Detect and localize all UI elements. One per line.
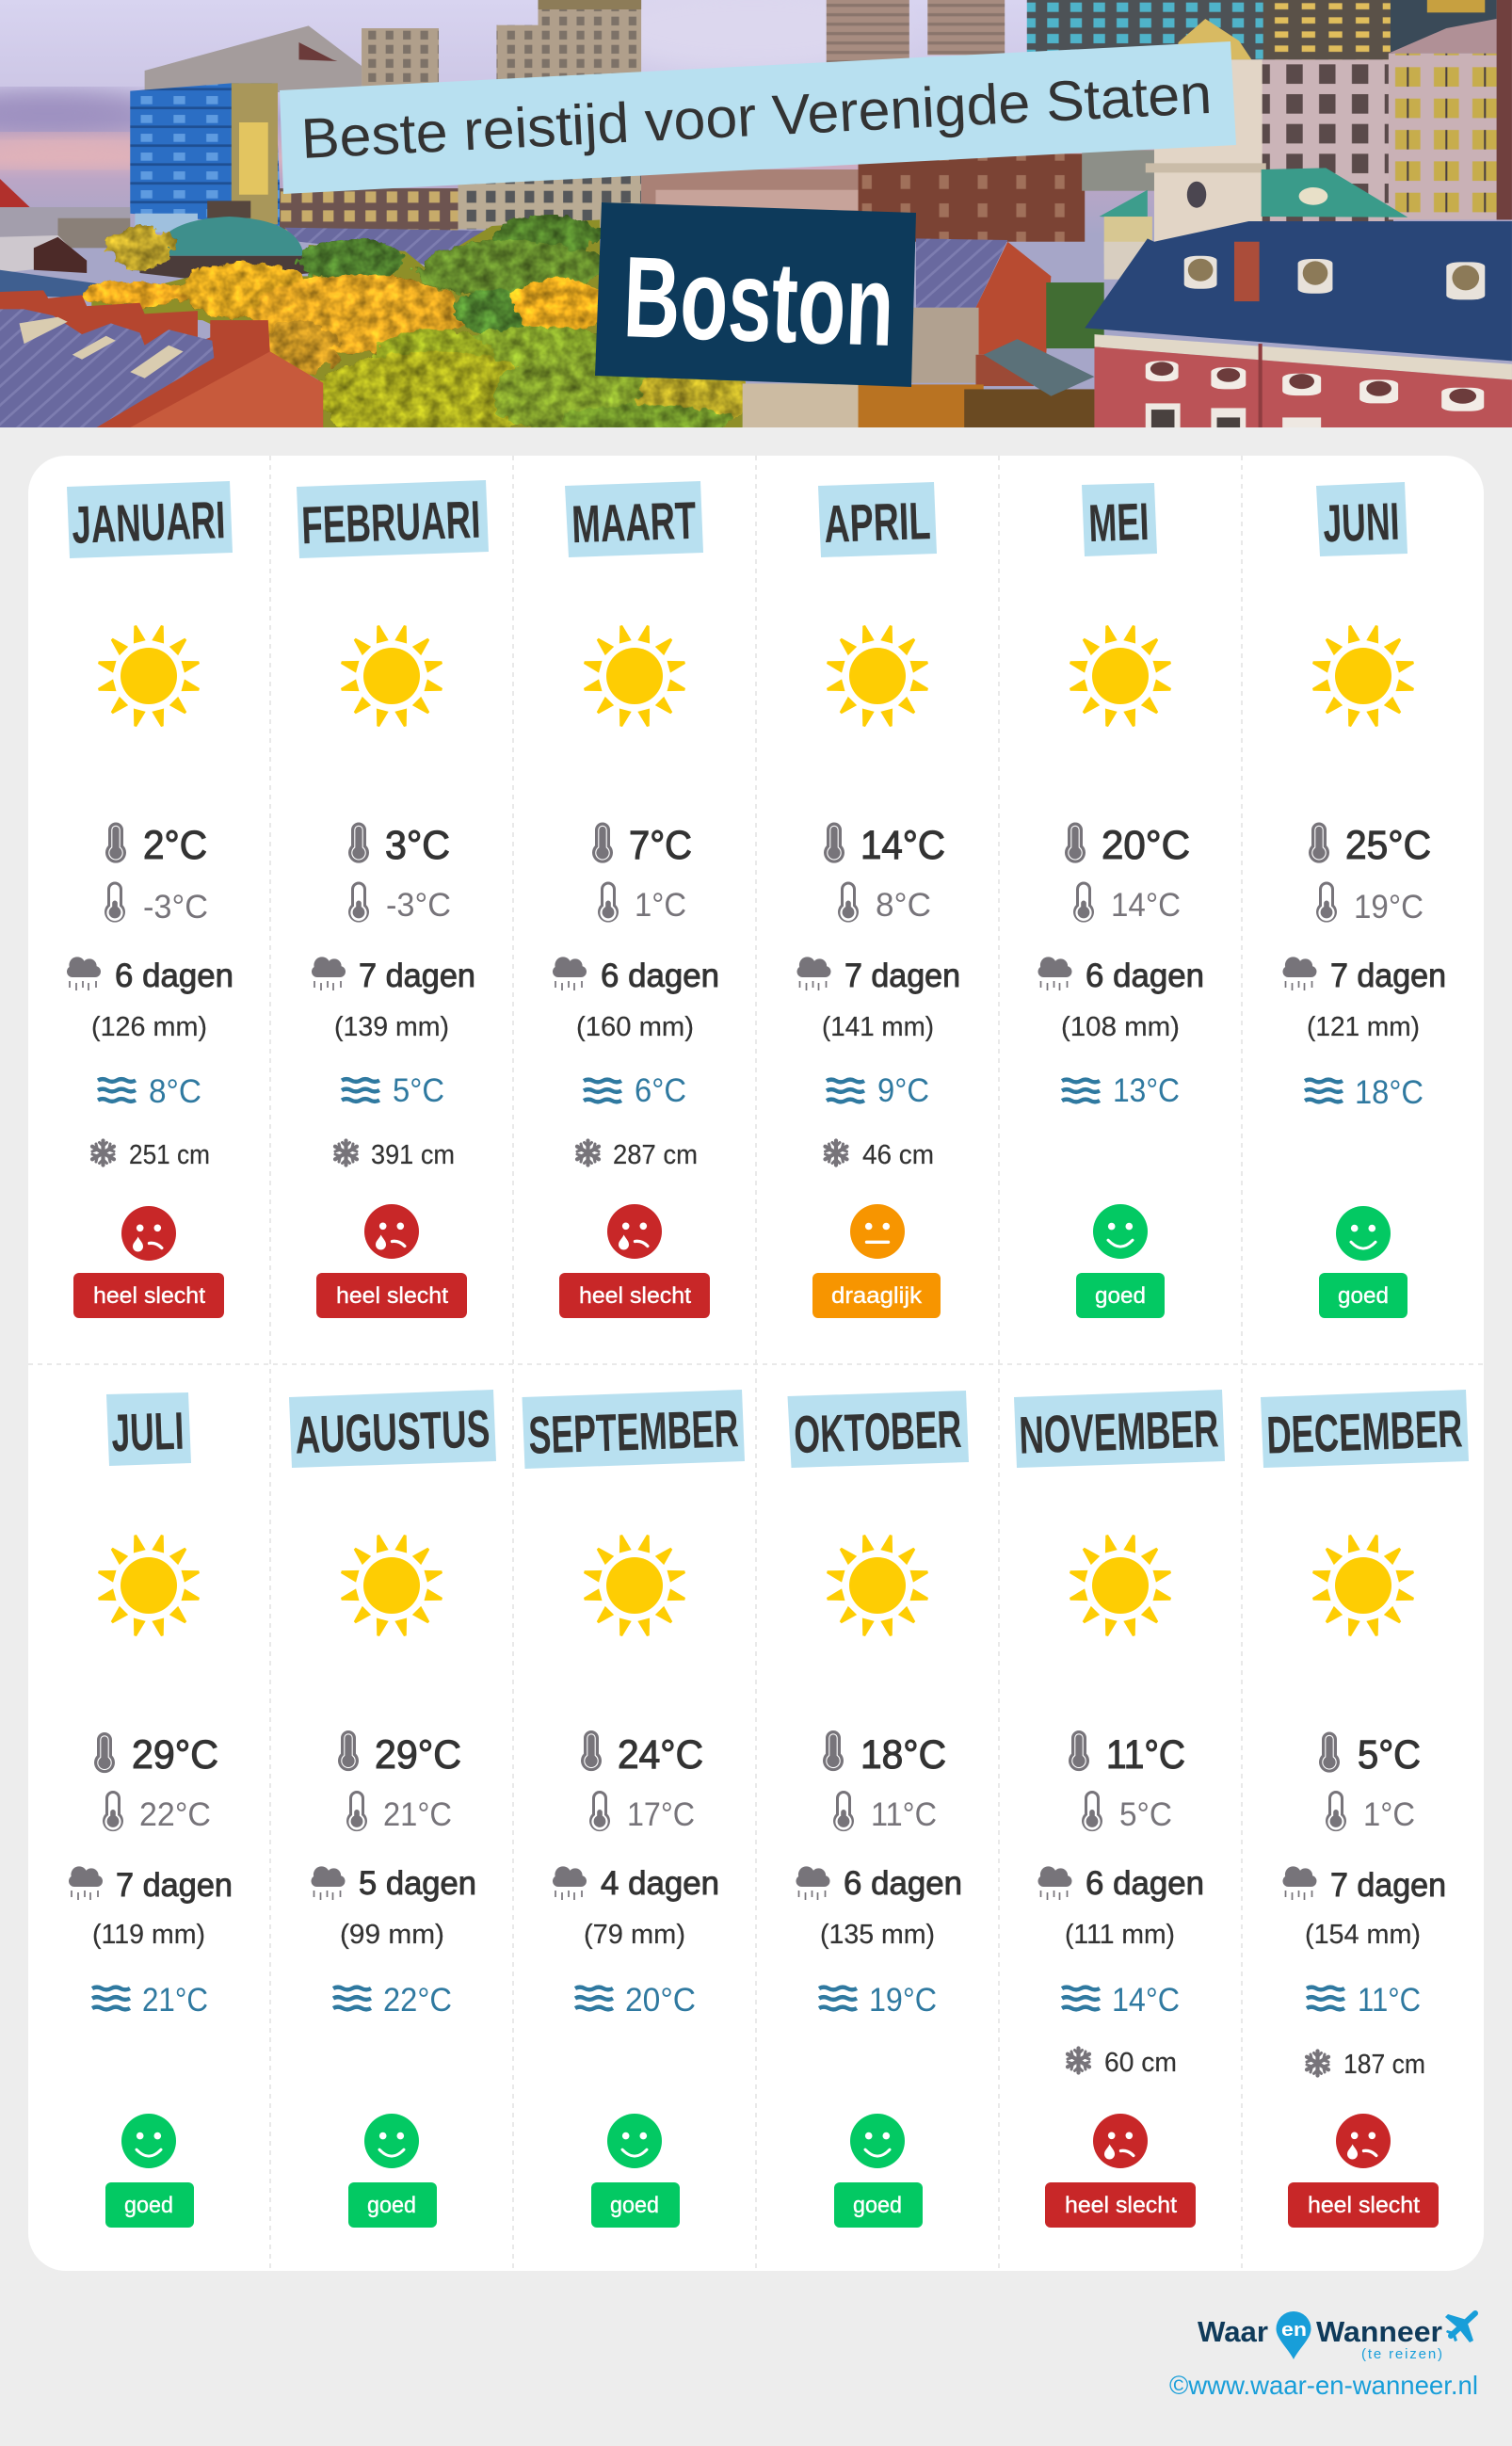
max temperature [1069, 1730, 1185, 1778]
water temperature [1305, 1074, 1424, 1111]
rating label [812, 1273, 941, 1318]
month heading [1082, 483, 1157, 556]
month panel: juli [69, 1392, 233, 2228]
min temperature [346, 1791, 452, 1833]
pink building [1259, 59, 1393, 223]
max temperature: 29°C [132, 1732, 218, 1778]
min temperature: 1°C [1363, 1796, 1415, 1833]
max temperature: 25°C [1345, 823, 1431, 868]
rating face [1336, 1206, 1391, 1261]
month heading [67, 481, 233, 558]
rating label: goed [124, 2193, 173, 2218]
icon: sun [1069, 624, 1172, 728]
min temperature: 22°C [139, 1796, 211, 1833]
snowfall [1068, 2048, 1177, 2078]
rainfall: (126 mm) [91, 1012, 207, 1042]
bottom-left brick and slate roofs [0, 290, 323, 427]
snowfall: 391 cm [371, 1140, 455, 1170]
water temperature: 18°C [1355, 1074, 1424, 1111]
icon: map pin: en [1281, 2320, 1307, 2341]
max temperature [105, 823, 207, 868]
min temperature: 19°C [1354, 889, 1424, 925]
month heading: SEPTEMBER [527, 1398, 739, 1465]
icon: sun [1069, 1534, 1172, 1637]
month panel: augustus [289, 1390, 496, 2228]
month panel: januari [67, 481, 233, 1318]
rating face [607, 1204, 662, 1259]
rating label [591, 2182, 680, 2228]
rainfall: (141 mm) [822, 1012, 934, 1042]
month panel: december [1261, 1390, 1469, 2228]
rain days: 6 dagen [1086, 957, 1204, 994]
max temperature: 3°C [385, 823, 450, 868]
rain days [1282, 957, 1446, 994]
min temperature: 11°C [871, 1796, 937, 1833]
rainfall: (111 mm) [1065, 1920, 1175, 1950]
month panel: maart [553, 481, 719, 1318]
trees [91, 219, 752, 427]
min temperature [598, 881, 686, 924]
rating face [364, 2114, 419, 2168]
min temperature [589, 1791, 695, 1833]
logo: Waar en Wanneer: Waar [1198, 2315, 1268, 2348]
central right low buildings [916, 238, 1007, 308]
copper dome and slate roof [284, 228, 496, 270]
max temperature [1309, 823, 1431, 868]
month heading: JUNI [1322, 491, 1400, 553]
snowfall: 46 cm [862, 1140, 934, 1170]
min temperature [1326, 1791, 1415, 1833]
rain days [1282, 1866, 1446, 1904]
city label: Boston [595, 202, 916, 387]
rating label [73, 1273, 224, 1318]
water temperature [333, 1982, 452, 2019]
rating label: heel slecht [336, 1283, 448, 1309]
icon: sun [97, 1534, 201, 1637]
rating face [364, 1204, 419, 1259]
website credit: ©www.waar-en-wanneer.nl [1169, 2371, 1478, 2400]
rain days [69, 1866, 233, 1904]
rain days [553, 957, 719, 994]
towers [539, 0, 641, 78]
max temperature [94, 1732, 218, 1778]
water temperature [1307, 1982, 1421, 2019]
rating label [316, 1273, 467, 1318]
month heading: MEI [1087, 491, 1150, 553]
rain days: 7 dagen [359, 957, 475, 994]
snowfall [1307, 2050, 1425, 2080]
rainfall: (119 mm) [92, 1920, 205, 1950]
min temperature: -3°C [143, 889, 208, 925]
month heading [106, 1392, 191, 1466]
snowfall: 251 cm [129, 1140, 210, 1170]
month heading [289, 1390, 496, 1468]
rainfall: (99 mm) [340, 1920, 444, 1950]
month panel: mei [1037, 483, 1204, 1318]
water temperature: 8°C [149, 1073, 201, 1110]
snowfall: 287 cm [613, 1140, 698, 1170]
min temperature: -3°C [386, 887, 451, 924]
max temperature: 5°C [1358, 1732, 1421, 1778]
rain days [312, 957, 475, 994]
rain days: 7 dagen [1330, 957, 1446, 994]
rating label [1076, 1273, 1165, 1318]
rainfall: (135 mm) [820, 1920, 935, 1950]
rain days: 7 dagen [844, 957, 960, 994]
rating face [607, 2114, 662, 2168]
rain days: 7 dagen [1330, 1867, 1446, 1904]
month heading [522, 1390, 745, 1469]
month panel: oktober [787, 1391, 969, 2228]
month heading: JULI [110, 1401, 185, 1462]
icon: sun [97, 624, 201, 728]
rainfall: (121 mm) [1307, 1012, 1420, 1042]
header photo: Boston skyline [0, 0, 1512, 427]
rain days: 6 dagen [844, 1865, 962, 1902]
rating label [559, 1273, 710, 1318]
icon: sun [583, 1534, 686, 1637]
water temperature [98, 1073, 201, 1110]
water temperature: 22°C [383, 1982, 452, 2019]
water temperature: 5°C [393, 1072, 444, 1109]
white card panel [28, 456, 1484, 2271]
rating face [1093, 1204, 1148, 1259]
water temperature: 14°C [1112, 1982, 1180, 2019]
water temperature: 11°C [1358, 1982, 1421, 2019]
month heading: APRIL [823, 491, 931, 554]
max temperature: 14°C [861, 823, 945, 868]
belfry [1177, 19, 1251, 59]
month heading [297, 480, 489, 558]
icon: sun [583, 624, 686, 728]
mid-ground [280, 188, 458, 231]
min temperature: 1°C [635, 887, 686, 924]
water temperature [575, 1982, 696, 2019]
month heading [1316, 482, 1407, 556]
min temperature [103, 1791, 211, 1833]
month heading [787, 1391, 969, 1468]
water temperature: 21°C [142, 1982, 208, 2019]
water temperature: 19°C [869, 1982, 937, 2019]
month heading: JANUARI [71, 490, 226, 555]
icon: sun [1311, 1534, 1415, 1637]
rating face [850, 1204, 905, 1259]
water temperature [92, 1982, 208, 2019]
rating label: goed [1338, 1283, 1389, 1309]
snowfall [92, 1140, 210, 1170]
month heading [1014, 1390, 1225, 1468]
max temperature: 7°C [629, 823, 692, 868]
min temperature [1082, 1791, 1172, 1833]
max temperature [1065, 823, 1190, 868]
min temperature [1073, 881, 1181, 924]
max temperature: 2°C [143, 823, 207, 868]
rating label [105, 2182, 194, 2228]
icon: sun [826, 624, 929, 728]
water temperature: 6°C [635, 1072, 686, 1109]
min temperature [833, 1791, 937, 1833]
rating label [348, 2182, 437, 2228]
month panel: juni [1282, 482, 1446, 1318]
max temperature [592, 823, 692, 868]
water temperature: 13°C [1113, 1072, 1180, 1109]
rating label: heel slecht [579, 1283, 691, 1309]
max temperature [823, 1730, 946, 1778]
icon: airplane [1445, 2313, 1475, 2342]
water temperature [342, 1072, 444, 1109]
icon: map pin [1277, 2311, 1311, 2359]
rating label: goed [610, 2193, 659, 2218]
rain days: 6 dagen [1086, 1865, 1204, 1902]
max temperature [348, 823, 450, 868]
min temperature [348, 881, 451, 924]
rating label [1288, 2182, 1439, 2228]
rating face [850, 2114, 905, 2168]
water temperature [584, 1072, 686, 1109]
month panel: september [522, 1390, 745, 2228]
water temperature [819, 1982, 937, 2019]
max temperature [338, 1730, 461, 1778]
water temperature [1062, 1072, 1180, 1109]
rating face [121, 1206, 176, 1261]
max temperature: 18°C [861, 1732, 946, 1778]
min temperature [838, 881, 931, 924]
rain days: 6 dagen [115, 957, 233, 994]
rating label [1045, 2182, 1196, 2228]
icon: sun [340, 624, 443, 728]
rainfall: (108 mm) [1061, 1012, 1180, 1042]
rain days: 7 dagen [116, 1867, 233, 1904]
month heading [818, 482, 937, 557]
rainfall: (160 mm) [576, 1012, 694, 1042]
rating label [1319, 1273, 1407, 1318]
min temperature [1316, 881, 1424, 925]
month panel: februari [297, 480, 489, 1318]
rain days: 5 dagen [359, 1865, 476, 1902]
rating face [1336, 2114, 1391, 2168]
rating label: goed [1095, 1283, 1146, 1309]
max temperature [581, 1730, 703, 1778]
snowfall [335, 1140, 455, 1170]
rainfall: (154 mm) [1305, 1920, 1421, 1950]
rain days: 4 dagen [601, 1865, 719, 1902]
icon: sun [340, 1534, 443, 1637]
min temperature: 21°C [383, 1796, 452, 1833]
rainfall: (79 mm) [584, 1920, 685, 1950]
rating label: draaglijk [831, 1283, 923, 1309]
min temperature: 8°C [876, 887, 931, 924]
month panel: april [796, 482, 960, 1318]
logo: Waar en Wanneer [1198, 2311, 1475, 2362]
brick hall with blue roof [1085, 221, 1512, 361]
rain days [67, 957, 233, 994]
month heading: AUGUSTUS [294, 1398, 491, 1465]
logo: Waar en Wanneer: (te reizen) [1361, 2346, 1442, 2362]
rating label: heel slecht [93, 1283, 205, 1309]
month heading: FEBRUARI [300, 490, 481, 555]
rating label: goed [367, 2193, 416, 2218]
icon: sun [826, 1534, 929, 1637]
water temperature [1062, 1982, 1180, 2019]
rainfall: (139 mm) [334, 1012, 449, 1042]
rating label: goed [853, 2193, 902, 2218]
month panel: november [1014, 1390, 1225, 2228]
city label: Boston: Boston [621, 233, 896, 370]
min temperature: 17°C [627, 1796, 695, 1833]
logo: Waar en Wanneer: Wanneer [1316, 2315, 1442, 2348]
min temperature [105, 881, 208, 925]
month heading: OKTOBER [793, 1399, 962, 1464]
rating face [1093, 2114, 1148, 2168]
snowfall [577, 1140, 698, 1170]
max temperature: 29°C [375, 1732, 461, 1778]
icon: sun [1311, 624, 1415, 728]
rain days [796, 957, 960, 994]
rating face [121, 2114, 176, 2168]
max temperature: 20°C [1102, 823, 1190, 868]
blue glass building [130, 83, 281, 226]
snowfall: 187 cm [1343, 2050, 1425, 2080]
rating label: heel slecht [1065, 2193, 1177, 2218]
min temperature: 14°C [1111, 887, 1181, 924]
water temperature [827, 1072, 929, 1109]
water temperature: 9°C [877, 1072, 929, 1109]
max temperature: 24°C [618, 1732, 703, 1778]
month heading [565, 481, 703, 557]
max temperature [824, 823, 945, 868]
min temperature: 5°C [1119, 1796, 1172, 1833]
snowfall: 60 cm [1104, 2048, 1177, 2078]
title banner: Beste reistijd voor Verenigde Staten: Beste reistijd voor Verenigde Staten [299, 62, 1213, 170]
month heading: NOVEMBER [1018, 1398, 1219, 1465]
title banner: Beste reistijd voor Verenigde Staten [280, 41, 1236, 194]
snowfall [825, 1140, 934, 1170]
water temperature: 20°C [625, 1982, 696, 2019]
rain days: 6 dagen [601, 957, 719, 994]
month heading: MAART [571, 491, 697, 554]
max temperature: 11°C [1106, 1732, 1185, 1778]
max temperature [1319, 1732, 1421, 1778]
rating label: heel slecht [1308, 2193, 1420, 2218]
rating label [834, 2182, 923, 2228]
